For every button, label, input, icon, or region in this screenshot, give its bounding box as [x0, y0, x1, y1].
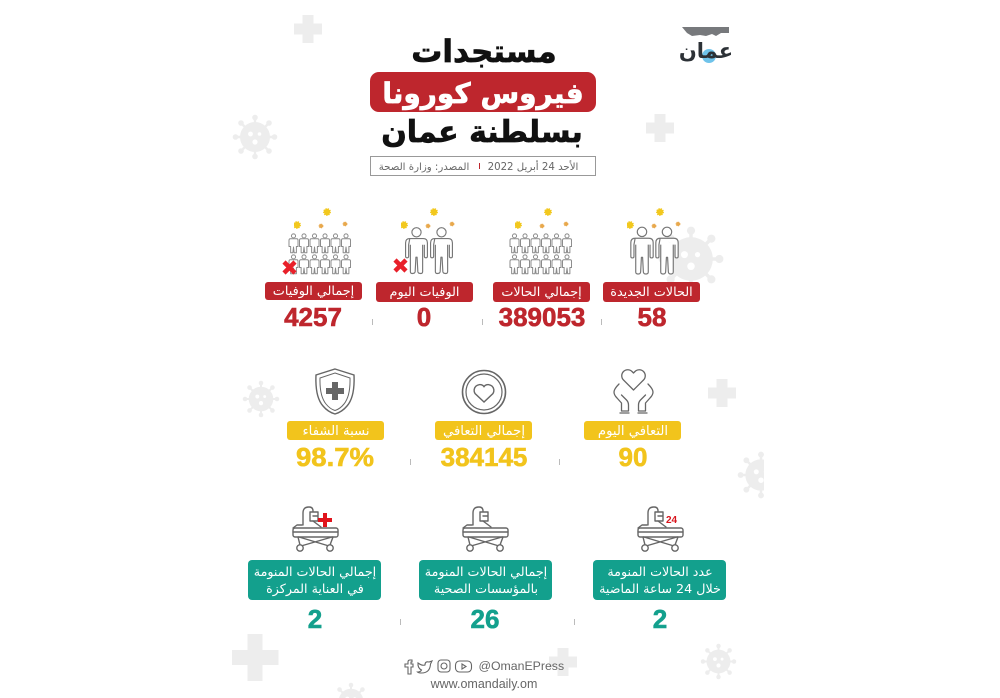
date and source box: المصدر: وزارة الصحة [379, 162, 469, 173]
label: نسبة الشفاء [302, 424, 370, 439]
icon: youtube [456, 661, 472, 672]
label: في العناية المركزة [266, 581, 364, 597]
stat: new cases [603, 209, 700, 332]
label: التعافي اليوم [598, 424, 668, 439]
footer: social icons [405, 660, 472, 674]
icon: two people with red cross [395, 209, 454, 274]
value: 90 [619, 442, 647, 472]
value: 2 [308, 604, 322, 634]
icon: shield with plus [316, 369, 354, 414]
label: خلال 24 ساعة الماضية [599, 581, 721, 596]
label: إجمالي الحالات المنومة [425, 564, 547, 580]
background virus: top row right [659, 227, 723, 291]
date and source box: الأحد 24 أبريل 2022 [488, 160, 578, 173]
value: 4257 [284, 302, 342, 332]
label: الوفيات اليوم [390, 285, 459, 300]
stat: total cases [493, 209, 590, 332]
background plus: bottom centre [549, 648, 577, 676]
icon: twitter [418, 661, 432, 673]
stat: hospitalised in health institutions [419, 507, 552, 634]
background virus: bottom left [333, 683, 369, 698]
label: إجمالي الحالات [501, 285, 582, 300]
background virus: upper left [233, 115, 277, 159]
icon: bed with red plus [293, 507, 338, 551]
value: 98.7% [296, 442, 374, 472]
label: عدد الحالات المنومة [607, 564, 713, 580]
logo: Oman daily: عمان [679, 39, 733, 63]
background plus: large bottom left [232, 634, 278, 681]
value: 26 [471, 604, 499, 634]
title line 3: بسلطنة عمان [381, 115, 583, 150]
icon: bed [463, 507, 508, 551]
label [593, 560, 726, 600]
icon: two people with germs [627, 209, 680, 274]
icon: instagram [438, 660, 450, 672]
stat: recovered today [584, 370, 681, 472]
stat: deaths today [376, 209, 473, 332]
background plus: upper right [646, 114, 674, 142]
background plus: middle right [708, 379, 736, 407]
icon: heart in circle [462, 370, 506, 414]
icon: facebook [405, 660, 413, 674]
background plus: top left [294, 15, 322, 43]
label: الحالات الجديدة [610, 285, 693, 300]
icon: bed with 24: 24 [666, 515, 678, 526]
stat: hospitalised last 24 hours [593, 507, 726, 634]
value: 0 [417, 302, 431, 332]
stat: total recovered [435, 370, 532, 472]
label: إجمالي التعافي [443, 424, 525, 439]
label: بالمؤسسات الصحية [434, 581, 538, 597]
icon: crowd with red cross [284, 209, 351, 274]
background virus: bottom right [701, 644, 736, 679]
title [370, 34, 596, 150]
value: 384145 [441, 442, 527, 472]
stat: hospitalised in intensive care [248, 507, 381, 634]
label [419, 560, 552, 600]
value: 2 [653, 604, 667, 634]
label: إجمالي الوفيات [273, 284, 354, 299]
value: 389053 [499, 302, 585, 332]
title line 1: مستجدات [411, 34, 557, 70]
value: 58 [638, 302, 666, 332]
logo: Oman daily [679, 27, 733, 63]
date and source box [370, 156, 596, 176]
title highlight box [370, 72, 596, 112]
background virus: right edge [738, 452, 764, 498]
stat: total deaths [265, 209, 362, 332]
footer: website: www.omandaily.om [430, 677, 537, 691]
background virus: middle left [243, 381, 279, 417]
icon: crowd with germs [510, 209, 572, 274]
label: إجمالي الحالات المنومة [254, 564, 376, 580]
title line 2: فيروس كورونا [382, 77, 584, 110]
icon: hands holding heart [614, 370, 653, 413]
label [248, 560, 381, 600]
footer: handle: @OmanEPress [478, 659, 564, 673]
stat: recovery rate [287, 369, 384, 472]
